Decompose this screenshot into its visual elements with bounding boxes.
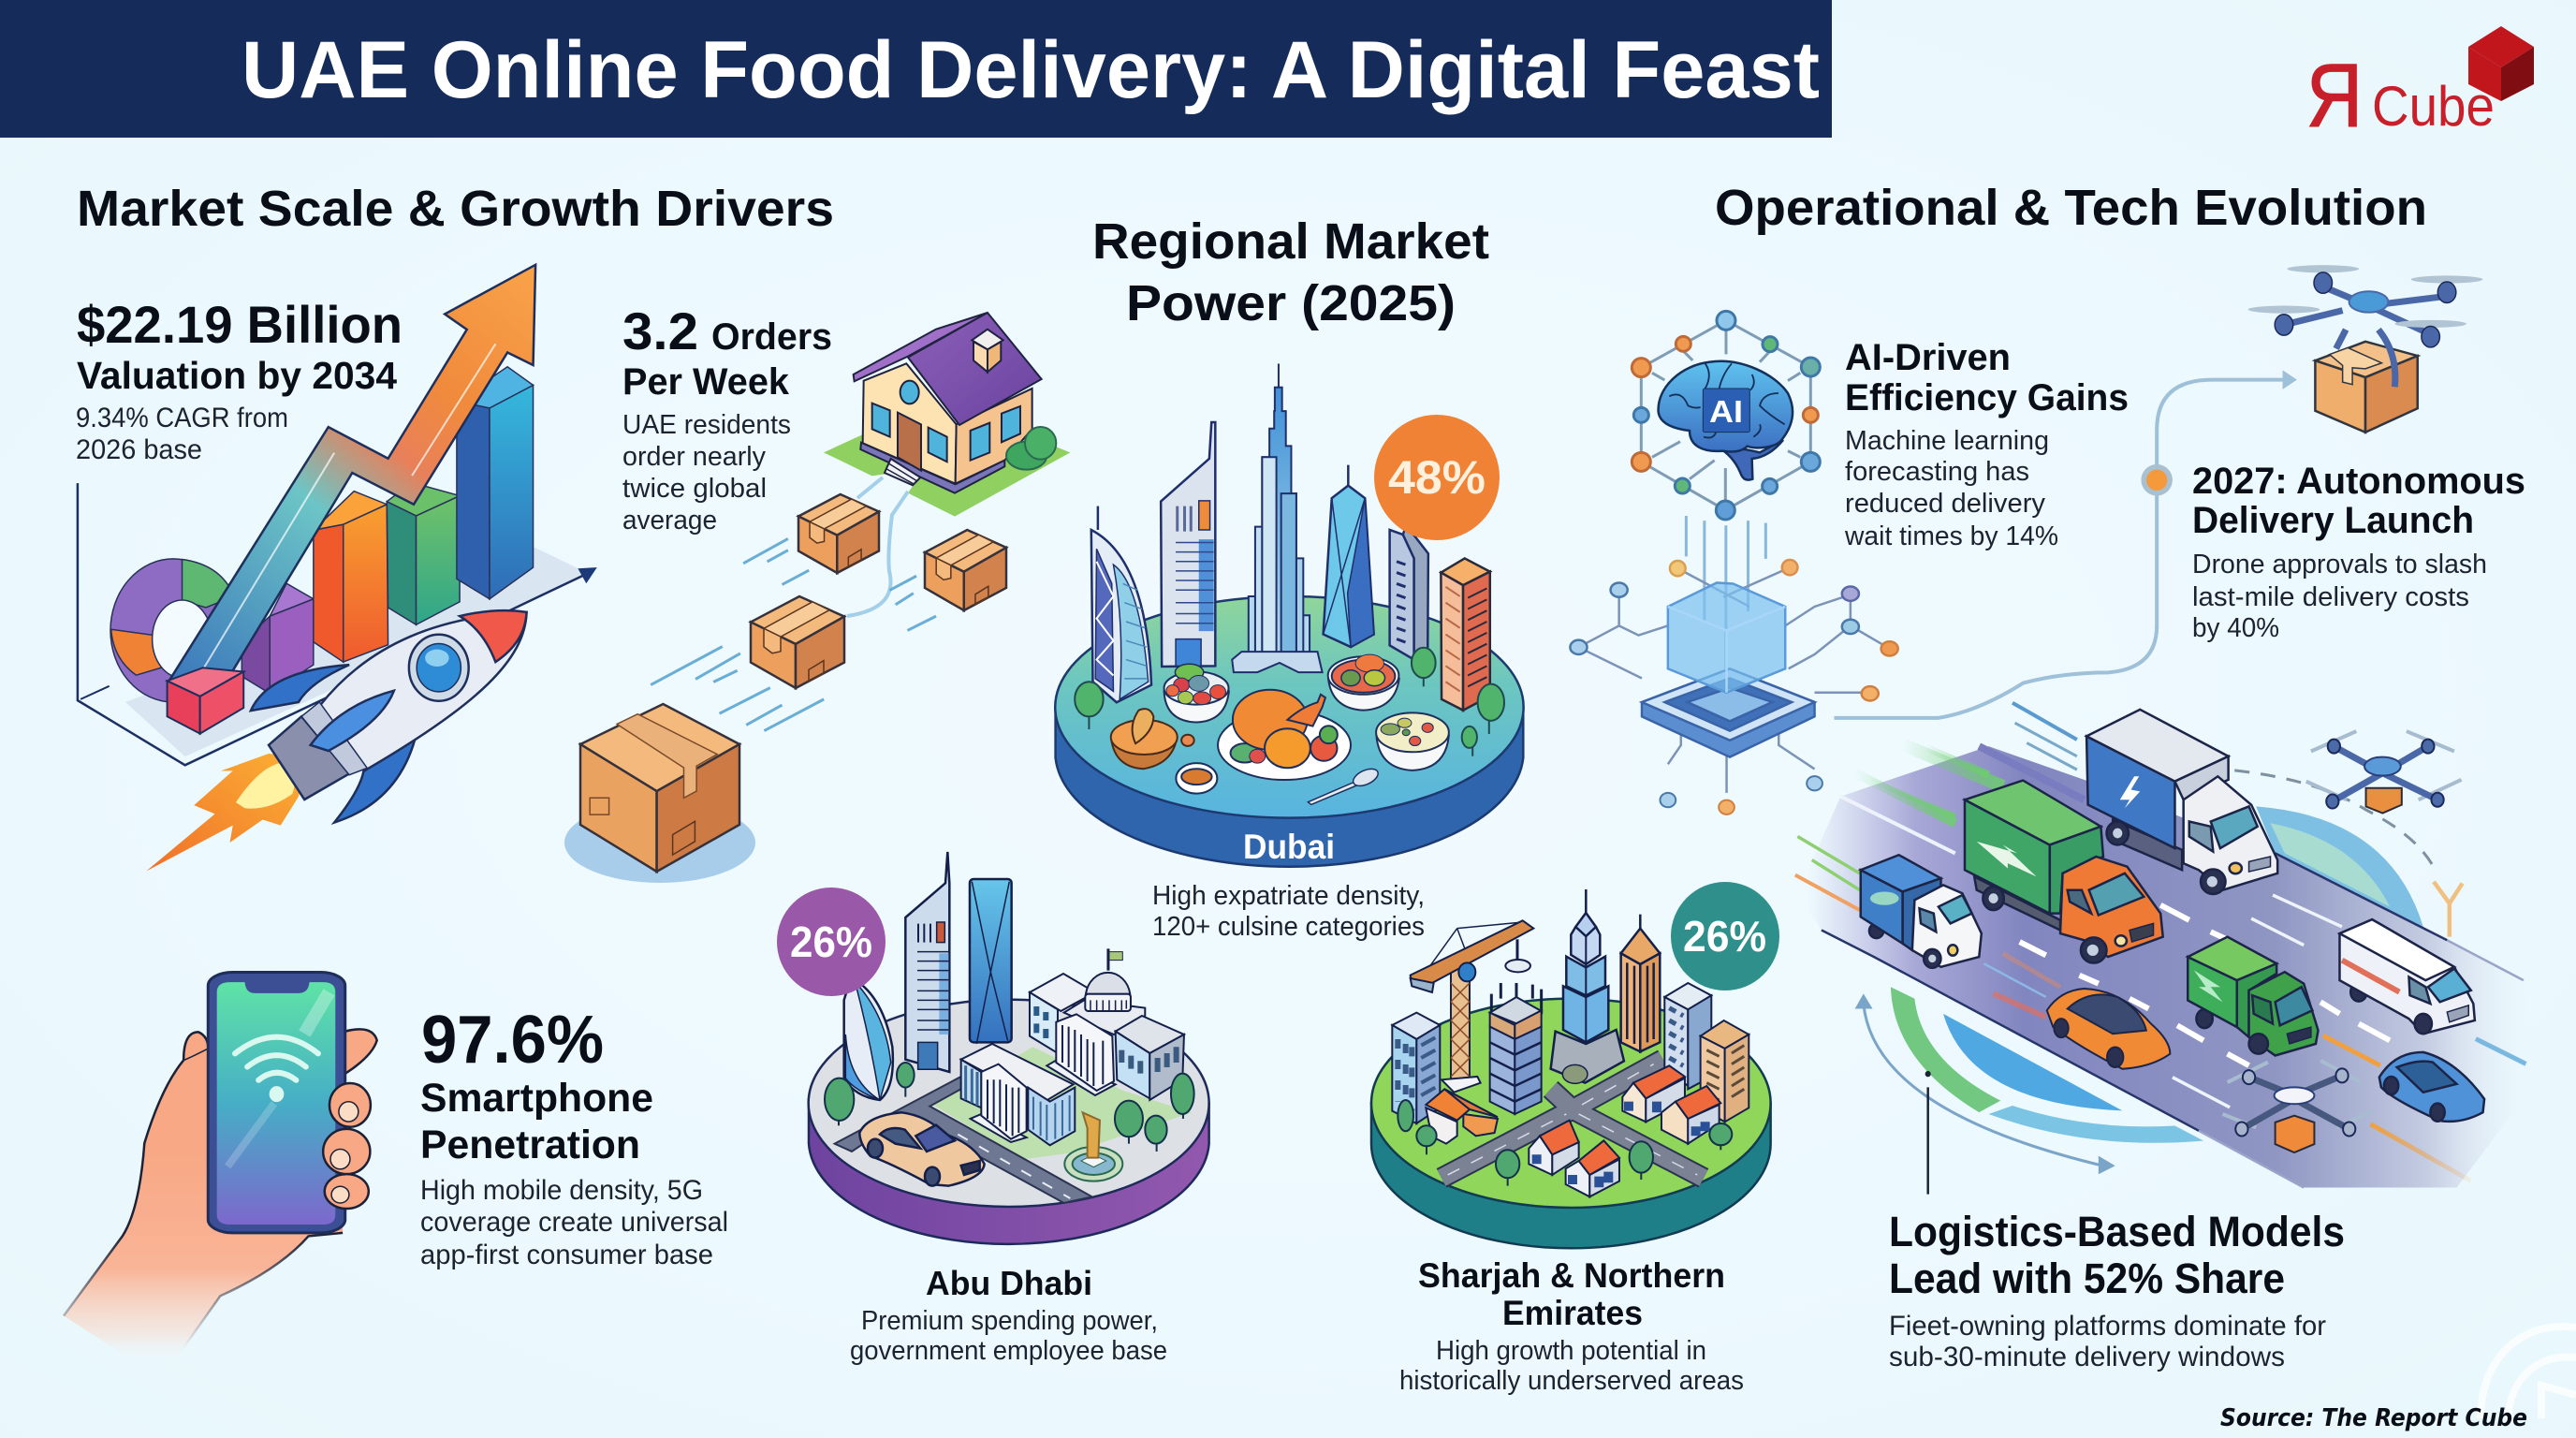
badge: Sharjah 26%	[1671, 882, 1779, 990]
stat: smartphone penetration: coverage create universal	[420, 1207, 728, 1238]
icon: AI brain with hexagon network	[1632, 311, 1820, 520]
drone: upper	[2306, 731, 2462, 814]
text: Abu Dhabi: Abu Dhabi	[926, 1264, 1092, 1302]
tower: twisted	[1324, 465, 1374, 647]
stat: smartphone penetration	[420, 1003, 728, 1270]
text: logistics-based models: Fieet-owning platforms dominate for	[1889, 1311, 2326, 1342]
truck: small green	[2188, 937, 2319, 1055]
badge: Dubai 48%: 48%	[1388, 451, 1486, 504]
stat: smartphone penetration: app-first consumer base	[420, 1240, 713, 1270]
text: AI-driven efficiency: wait times by 14%	[1844, 521, 2058, 551]
title banner	[0, 0, 1832, 138]
tower: stepped	[905, 852, 949, 1072]
badge: Abu Dhabi 26%	[777, 888, 886, 996]
truck: green	[1965, 781, 2163, 963]
road edges	[1822, 853, 2447, 1131]
text: Sharjah and Northern Emirates: Emirates	[1502, 1294, 1643, 1332]
logo: RCube	[2306, 26, 2534, 146]
stat: smartphone penetration: Penetration	[420, 1123, 640, 1167]
heading: regional market power	[1092, 213, 1489, 331]
food: cream bowl	[1376, 712, 1449, 770]
text: autonomous delivery	[2192, 461, 2525, 643]
rocket	[146, 610, 527, 872]
text: Sharjah and Northern Emirates: High growth potential in	[1436, 1336, 1706, 1366]
illustration: delivery boxes	[564, 494, 1006, 883]
brain	[1659, 361, 1793, 480]
lower circuit nodes	[1661, 776, 1822, 814]
heading: operational and tech evolution: Operational & Tech Evolution	[1715, 180, 2427, 236]
speed streaks	[1795, 703, 2525, 1181]
trees	[1398, 1100, 1732, 1186]
panel: Dubai platform	[1055, 363, 1524, 867]
stat: market valuation: Valuation by 2034	[77, 354, 397, 397]
text: autonomous delivery: Drone approvals to slash	[2192, 550, 2487, 580]
circuit traces	[1570, 560, 1898, 700]
badge: Dubai 48%	[1374, 415, 1500, 540]
lane dashes	[2020, 905, 2390, 1065]
food: dip and spoon	[1176, 763, 1381, 804]
food: salad bowl	[1164, 664, 1229, 723]
growth arrow	[168, 265, 535, 734]
tower: grey	[1390, 525, 1428, 660]
beams	[1686, 516, 1765, 668]
tower: Burj Al Arab	[1091, 506, 1151, 702]
text: logistics-based models: sub-30-minute delivery windows	[1889, 1342, 2285, 1372]
stat: orders per week: Orders	[711, 316, 832, 358]
chart floor and axes	[78, 483, 597, 765]
stat: market valuation: 9.34% CAGR from	[76, 403, 288, 433]
heading: regional market power: Power (2025)	[1126, 275, 1456, 331]
stat: orders per week: 3.2	[622, 301, 698, 360]
bar: orange	[314, 492, 388, 662]
text: AI-driven efficiency	[1844, 337, 2129, 551]
badge: Abu Dhabi 26%: 26%	[790, 917, 872, 966]
text: Abu Dhabi	[850, 1264, 1167, 1366]
truck: blue	[2086, 710, 2277, 894]
panel: AI and tech illustration	[1570, 265, 2482, 814]
AI chip label: AI	[1709, 394, 1743, 429]
text: Dubai description	[1152, 881, 1425, 942]
tower: Emirates	[1161, 422, 1215, 667]
road	[1797, 746, 2527, 1188]
text: Sharjah and Northern Emirates: Sharjah & Northern	[1418, 1256, 1725, 1295]
truck: small blue	[1861, 855, 1982, 968]
roads	[1442, 1060, 1704, 1178]
text: AI-driven efficiency: forecasting has	[1845, 457, 2029, 487]
stat: orders per week: average	[622, 506, 717, 536]
sign post	[2434, 882, 2463, 937]
food: curry bowl	[1328, 654, 1399, 711]
fingers	[323, 1083, 371, 1209]
trees	[1075, 648, 1504, 756]
text: autonomous delivery: 2027: Autonomous	[2192, 461, 2525, 502]
text: AI-driven efficiency: reduced delivery	[1845, 489, 2045, 519]
stat: orders per week: Per Week	[622, 361, 790, 403]
government complex	[961, 948, 1184, 1145]
tower: orange	[1621, 915, 1660, 1051]
tower: glass	[970, 879, 1012, 1044]
stat: market valuation: 2026 base	[76, 434, 202, 465]
text: Dubai description: High expatriate density,	[1152, 881, 1425, 911]
bar: blue	[457, 367, 534, 599]
towers: right	[1664, 983, 1749, 1122]
chip and hologram cube	[1642, 582, 1815, 793]
stat: market valuation	[76, 295, 402, 465]
text: Dubai description: 120+ culsine categories	[1152, 912, 1425, 942]
bar: purple	[242, 583, 314, 694]
stat: market valuation: $22.19 Billion	[77, 295, 402, 354]
van: white	[2339, 919, 2475, 1034]
text: logistics-based models: Logistics-Based Models	[1889, 1208, 2345, 1255]
hand	[64, 1032, 343, 1379]
houses	[1426, 1065, 1720, 1196]
panel: Abu Dhabi platform	[809, 852, 1209, 1244]
tower: Burj Khalifa	[1232, 363, 1323, 672]
stat: smartphone penetration: High mobile density, 5G	[420, 1175, 703, 1206]
dashed drone path	[2234, 770, 2436, 870]
hexagon network	[1632, 311, 1820, 520]
illustration: hand holding phone	[64, 973, 377, 1379]
donut chart	[110, 559, 236, 702]
top finger	[343, 1029, 377, 1075]
fountain	[1064, 1112, 1122, 1181]
text: Sharjah and Northern Emirates	[1399, 1256, 1744, 1396]
blue and green base shapes	[1891, 806, 2423, 1143]
circular arrows	[1855, 993, 2115, 1174]
title banner: UAE Online Food Delivery: A Digital Feast	[242, 25, 1820, 115]
platform base	[1371, 999, 1771, 1248]
heading: market scale: Market Scale & Growth Drivers	[77, 181, 834, 237]
timeline node	[2141, 464, 2173, 496]
text: autonomous delivery: Delivery Launch	[2192, 500, 2474, 541]
car: blue	[2379, 1052, 2484, 1122]
phone	[208, 973, 345, 1233]
platform base	[809, 1000, 1209, 1244]
watermark	[2481, 1327, 2576, 1418]
tower: sail	[844, 980, 893, 1100]
platform base	[1055, 596, 1524, 867]
flow arrow to drone	[1834, 370, 2297, 718]
crane	[1411, 920, 1533, 1093]
source note: Source: The Report Cube	[2220, 1404, 2527, 1432]
drone with parcel	[2248, 265, 2482, 433]
text: logistics-based models	[1889, 1208, 2345, 1372]
highway logistics illustration	[1795, 703, 2527, 1195]
stat: smartphone penetration: Smartphone	[420, 1076, 653, 1121]
drone frame	[2248, 265, 2482, 387]
text: autonomous delivery: last-mile delivery costs	[2192, 582, 2469, 612]
lawn and road	[835, 1047, 1192, 1203]
stat: orders per week: UAE residents	[622, 410, 791, 440]
building: left block	[1392, 1013, 1440, 1123]
text: logistics-based models: Lead with 52% Share	[1889, 1255, 2285, 1302]
stat: orders per week	[622, 301, 832, 536]
car: orange	[2047, 989, 2170, 1069]
icon: wifi signal	[235, 1037, 318, 1102]
bar: green	[387, 482, 460, 624]
region label: Dubai: Dubai	[1243, 828, 1335, 866]
panel: Sharjah platform	[1371, 889, 1771, 1248]
stat: smartphone penetration: 97.6%	[421, 1003, 604, 1078]
parcel	[2315, 342, 2418, 433]
panel: growth chart and rocket	[78, 265, 597, 872]
food: left dish	[1111, 709, 1194, 769]
stat: orders per week: order nearly	[622, 442, 766, 472]
text: AI-driven efficiency: Efficiency Gains	[1845, 377, 2129, 418]
heading: regional market power: Regional Market	[1092, 213, 1489, 270]
car	[859, 1112, 985, 1186]
drone: lower	[2222, 1061, 2373, 1152]
badge: Sharjah 26%: 26%	[1683, 912, 1766, 961]
logo: RCube: Я	[2306, 46, 2363, 146]
food: roast chicken plate	[1218, 690, 1351, 780]
logo: RCube: Cube	[2372, 75, 2495, 138]
text: autonomous delivery: by 40%	[2192, 613, 2279, 643]
tower: red	[1441, 558, 1490, 711]
illustration: delivery path and speed lines	[651, 477, 936, 731]
text: AI-driven efficiency: AI-Driven	[1845, 337, 2011, 378]
stat: orders per week: twice global	[622, 474, 767, 504]
trees	[825, 1063, 1194, 1152]
tower: spire	[1551, 889, 1624, 1083]
callout line	[1925, 1071, 1931, 1195]
illustration: house	[824, 313, 1070, 517]
text: Sharjah and Northern Emirates: historically underserved areas	[1399, 1366, 1744, 1396]
text: AI-driven efficiency: Machine learning	[1845, 426, 2049, 456]
text: Abu Dhabi: Premium spending power,	[861, 1306, 1158, 1336]
text: Abu Dhabi: government employee base	[850, 1336, 1167, 1366]
building: under construction	[1490, 983, 1542, 1114]
